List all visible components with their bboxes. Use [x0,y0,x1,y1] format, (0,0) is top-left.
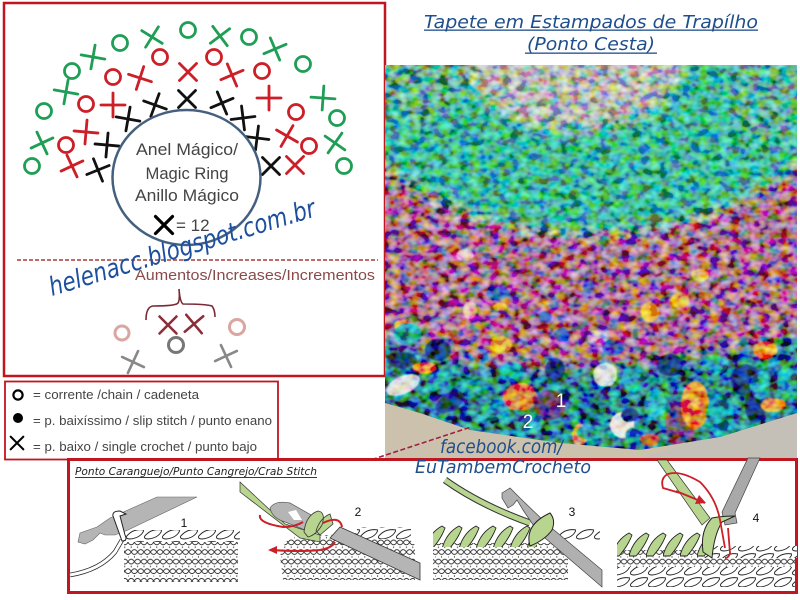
title [424,12,758,55]
facebook page name: EuTambemCrocheto [415,457,591,478]
red stitch ring [58,50,316,177]
legend: chain: = corrente /chain / cadeneta [33,388,199,402]
rug labels 1 and 2: 1 [556,391,566,412]
increase diagram [115,289,244,373]
photo: braided rag rug [385,65,797,458]
legend: slip stitch: = p. baixíssimo / slip stitch / punto enano [33,414,272,428]
rug detail: braided border [383,323,797,447]
green stitch ring [24,22,352,174]
legend: single crochet: = p. baixo / single crochet / punto bajo [33,440,257,454]
rug detail: upper blobs [394,249,709,356]
magic ring circle: = 12 [176,216,210,235]
title: Tapete em Estampados de Trapílho [424,12,758,33]
panel: crab stitch steps [68,458,797,592]
step 2 diagram: 2 [355,505,362,519]
magic ring circle: Magic Ring [146,164,228,183]
step 3 diagram [433,480,602,587]
increases heading: Aumentos/Increases/Incrementos [135,267,375,284]
watermark: blog address: helenacc.blogspot.com.br [45,193,321,303]
rug labels 1 and 2 [524,394,566,428]
magic ring circle: Anillo Mágico [135,186,239,205]
step 1 diagram: 1 [181,516,188,530]
black stitch ring [87,90,280,181]
step 1 diagram [70,497,240,582]
panel: crochet chart [4,3,385,376]
crab stitch heading: Ponto Caranguejo/Punto Cangrejo/Crab Stitch [75,466,317,478]
legend: single crochet [11,437,257,454]
panel: legend [5,382,278,460]
step 2 diagram [240,482,420,580]
dashed pointer to rug [322,427,471,476]
step 3 diagram: 3 [569,505,576,519]
step 4 diagram [617,458,797,587]
magic ring circle: Anel Mágico/ [136,140,238,159]
step 4 diagram: 4 [753,511,760,525]
title: (Ponto Cesta) [527,34,655,55]
facebook address: facebook.com/ [440,436,565,458]
dashed divider [17,259,378,261]
magic ring circle [112,110,260,245]
rug labels 1 and 2: 2 [523,412,533,433]
